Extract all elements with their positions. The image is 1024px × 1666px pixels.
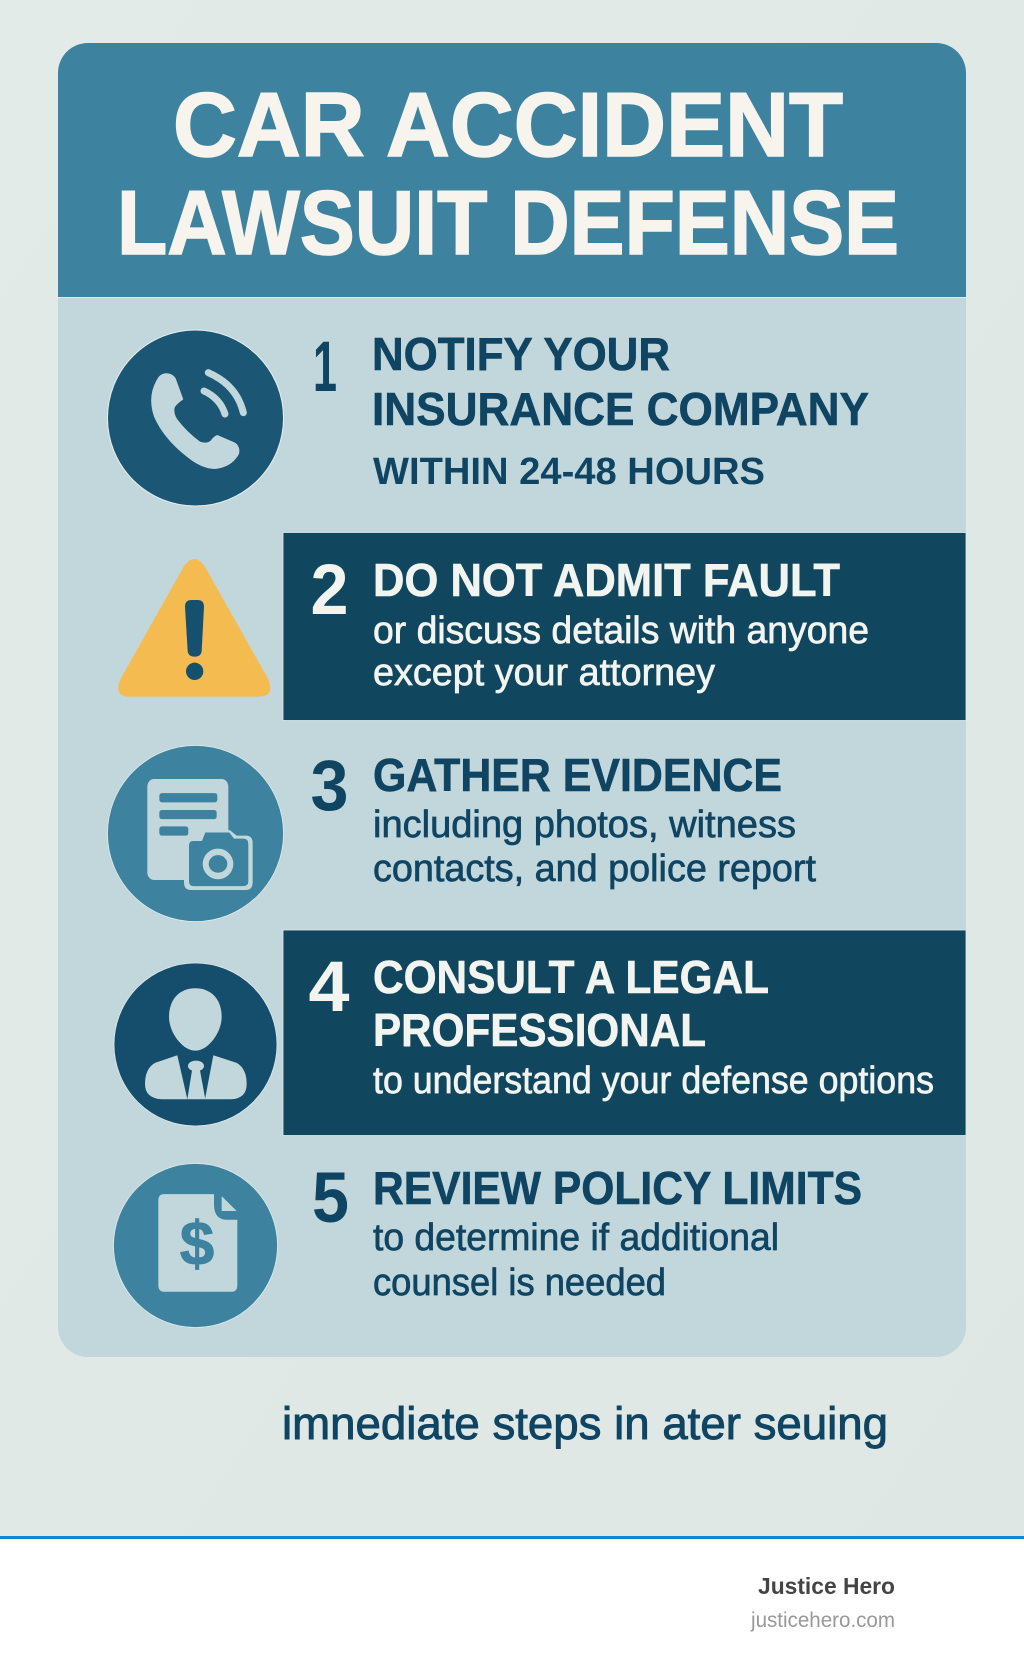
step 1 detail: WITHIN 24-48 HOURS <box>373 451 765 493</box>
step 2: do not admit fault <box>118 532 966 720</box>
step 2 heading: DO NOT ADMIT FAULT <box>373 554 840 606</box>
panel: step 2 bar <box>283 532 966 720</box>
step 5 detail: to determine if additional <box>373 1217 779 1259</box>
panel: step 4 bar <box>283 930 966 1136</box>
step 1 heading: INSURANCE COMPANY <box>372 383 869 435</box>
title <box>117 75 899 274</box>
main card <box>58 43 966 1357</box>
panel: steps body <box>58 297 966 1357</box>
step number 4: 4 <box>308 948 350 1027</box>
step 2 detail <box>373 610 869 694</box>
title: CAR ACCIDENT <box>173 75 843 176</box>
icon: dollar document <box>114 1164 278 1328</box>
step 1: notify insurance <box>108 328 869 506</box>
step 4 heading: CONSULT A LEGAL <box>373 951 769 1003</box>
step 4: consult legal professional <box>114 930 966 1136</box>
icon: warning triangle <box>118 559 270 697</box>
step 5 heading: REVIEW POLICY LIMITS <box>373 1162 862 1214</box>
footer brand <box>750 1573 895 1632</box>
icon: phone <box>108 330 284 506</box>
title: LAWSUIT DEFENSE <box>117 173 899 274</box>
step 5 detail: counsel is needed <box>373 1262 666 1304</box>
step 3 detail: including photos, witness <box>373 804 796 846</box>
step 3 detail <box>373 804 816 890</box>
step 2 detail: or discuss details with anyone <box>373 610 869 652</box>
step number 2: 2 <box>310 551 348 630</box>
step 3 heading: GATHER EVIDENCE <box>373 749 782 801</box>
step number 1: 1 <box>313 328 337 407</box>
footer brand: Justice Hero <box>758 1573 895 1599</box>
step number 5: 5 <box>312 1159 349 1238</box>
icon: attorney <box>114 963 277 1126</box>
step 4 heading: PROFESSIONAL <box>373 1004 706 1056</box>
step 3: gather evidence <box>108 746 816 922</box>
step number 3: 3 <box>310 747 348 826</box>
tagline: imnediate steps in ater seuing <box>282 1398 888 1449</box>
step 3 detail: contacts, and police report <box>373 848 816 890</box>
step 2 detail: except your attorney <box>373 652 715 694</box>
step 5: review policy limits <box>114 1159 862 1328</box>
step 1 heading <box>372 328 869 435</box>
icon: document and camera <box>108 746 284 922</box>
step 5 detail <box>373 1217 779 1304</box>
footer brand: justicehero.com <box>750 1609 895 1632</box>
step 4 heading <box>373 951 769 1056</box>
step 1 heading: NOTIFY YOUR <box>372 328 670 380</box>
icon: dollar document: $ <box>180 1210 214 1279</box>
panel: header band <box>58 43 966 297</box>
step 4 detail: to understand your defense options <box>373 1060 934 1102</box>
footer divider <box>0 1536 1024 1539</box>
